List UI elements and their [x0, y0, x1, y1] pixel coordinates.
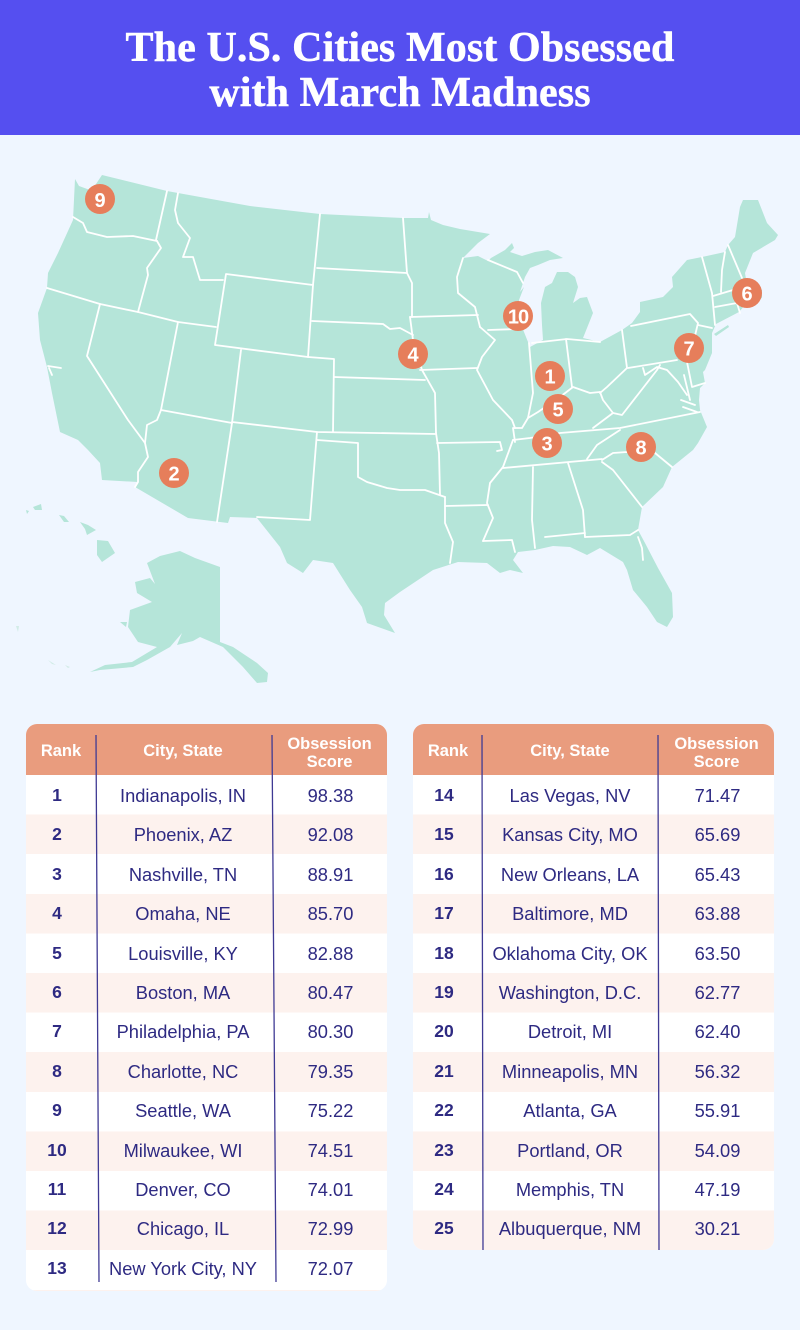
marker: 2 Phoenix	[159, 458, 189, 488]
marker: 10 Milwaukee: 10	[508, 306, 529, 328]
table rows: 10	[47, 1140, 67, 1160]
table rows: 12	[47, 1218, 67, 1238]
marker: 5 Louisville	[543, 394, 573, 424]
table header: Obsession	[674, 735, 759, 753]
table rows: 75.22	[308, 1100, 353, 1121]
table rows: Minneapolis, MN	[502, 1061, 638, 1082]
map of the United States	[16, 175, 778, 683]
marker: 6 Boston	[732, 278, 762, 308]
table rows: 62.77	[695, 982, 740, 1003]
marker: 7 Philadelphia	[674, 333, 704, 363]
marker: 2 Phoenix: 2	[168, 464, 180, 486]
marker: 9 Seattle: 9	[94, 190, 106, 212]
table rows: 47.19	[695, 1179, 740, 1200]
table rows: 23	[434, 1140, 454, 1160]
contiguous states landmass	[38, 175, 778, 633]
table rows: 25	[434, 1218, 454, 1238]
table rows: 63.88	[695, 903, 740, 924]
Hawaii	[26, 504, 127, 627]
table rows: 24	[434, 1179, 454, 1199]
table rows: 13	[47, 1258, 67, 1278]
table rows: 8	[52, 1061, 62, 1081]
title: with March Madness	[209, 70, 591, 116]
marker: 9 Seattle	[85, 184, 115, 214]
Alaska	[90, 551, 268, 683]
table rows: Milwaukee, WI	[124, 1140, 242, 1161]
table header: Obsession	[287, 735, 372, 753]
table rows: 92.08	[308, 824, 353, 845]
table rows: Oklahoma City, OK	[492, 943, 648, 964]
table rows: Washington, D.C.	[499, 982, 641, 1003]
table rows: Kansas City, MO	[502, 824, 638, 845]
table header: City, State	[143, 742, 223, 760]
table rows: Las Vegas, NV	[510, 785, 630, 806]
title: The U.S. Cities Most Obsessed	[126, 25, 674, 71]
table rows: 63.50	[695, 943, 740, 964]
table rows: Albuquerque, NM	[499, 1218, 641, 1239]
table rows: 14	[434, 785, 454, 805]
table rows: 16	[434, 864, 454, 884]
table rows: 9	[52, 1100, 62, 1120]
table rows: Louisville, KY	[128, 943, 238, 964]
marker: 8 Charlotte: 8	[635, 438, 647, 460]
table header: Score	[307, 753, 352, 771]
table header: Rank	[428, 742, 468, 760]
table rows: 55.91	[695, 1100, 740, 1121]
table rows: Detroit, MI	[528, 1021, 612, 1042]
table rows: 72.07	[308, 1258, 353, 1279]
table rows: Philadelphia, PA	[117, 1021, 249, 1042]
table rows: 74.01	[308, 1179, 353, 1200]
table rows: 65.43	[695, 864, 740, 885]
table header: Score	[694, 753, 739, 771]
Aleutian islands	[16, 626, 70, 668]
table header	[413, 724, 774, 775]
table rows: New York City, NY	[109, 1258, 257, 1279]
table rows: 85.70	[308, 903, 353, 924]
title	[126, 25, 674, 116]
table rows: 80.30	[308, 1021, 353, 1042]
table rows: Memphis, TN	[516, 1179, 624, 1200]
table rows: 54.09	[695, 1140, 740, 1161]
ranking table: ranks 14 to 25	[413, 724, 774, 1250]
marker: 4 Omaha: 4	[407, 344, 419, 366]
table rows: Omaha, NE	[135, 903, 231, 924]
table rows: 71.47	[695, 785, 740, 806]
table rows: Chicago, IL	[137, 1218, 229, 1239]
table rows: Indianapolis, IN	[120, 785, 246, 806]
table rows: Charlotte, NC	[128, 1061, 238, 1082]
table rows: 11	[48, 1179, 66, 1199]
table rows: 65.69	[695, 824, 740, 845]
table header: Rank	[41, 742, 81, 760]
table header: City, State	[530, 742, 610, 760]
table rows: Baltimore, MD	[512, 903, 628, 924]
table rows: 18	[434, 943, 454, 963]
Long Island	[714, 325, 729, 336]
table header	[26, 724, 387, 775]
marker: 3 Nashville: 3	[541, 434, 553, 456]
marker: 4 Omaha	[398, 339, 428, 369]
table rows: Boston, MA	[136, 982, 230, 1003]
table rows: 5	[52, 943, 62, 963]
table rows: 98.38	[308, 785, 353, 806]
table rows: 74.51	[308, 1140, 353, 1161]
table rows: 19	[434, 982, 454, 1002]
table rows: 82.88	[308, 943, 353, 964]
table rows: Atlanta, GA	[523, 1100, 617, 1121]
table rows: 3	[52, 864, 62, 884]
table rows: 4	[52, 903, 62, 923]
table rows: 56.32	[695, 1061, 740, 1082]
marker: 10 Milwaukee	[503, 301, 533, 331]
table rows: 17	[434, 903, 454, 923]
table rows: 1	[52, 785, 62, 805]
table rows: Nashville, TN	[129, 864, 237, 885]
marker: 1 Indianapolis	[535, 361, 565, 391]
table rows: 21	[434, 1061, 454, 1081]
marker: 3 Nashville	[532, 428, 562, 458]
table rows: 2	[52, 824, 62, 844]
table rows: 80.47	[308, 982, 353, 1003]
table rows: 20	[434, 1021, 454, 1041]
state borders	[47, 191, 742, 563]
table rows: 79.35	[308, 1061, 353, 1082]
table rows: 15	[434, 824, 454, 844]
marker: 5 Louisville: 5	[552, 400, 564, 422]
table rows: New Orleans, LA	[501, 864, 639, 885]
ranking table: ranks 1 to 13	[26, 724, 387, 1291]
table rows: 30.21	[695, 1218, 740, 1239]
table rows: 22	[434, 1100, 454, 1120]
marker: 6 Boston: 6	[741, 284, 753, 306]
table rows: Denver, CO	[135, 1179, 231, 1200]
table rows	[413, 775, 774, 1250]
marker: 7 Philadelphia: 7	[683, 338, 695, 360]
table rows	[26, 775, 387, 1291]
marker: 8 Charlotte	[626, 432, 656, 462]
table rows: 62.40	[695, 1021, 740, 1042]
title banner	[0, 0, 800, 135]
table rows: 6	[52, 982, 62, 1002]
table rows: 72.99	[308, 1218, 353, 1239]
marker: 1 Indianapolis: 1	[544, 366, 556, 388]
table rows: 88.91	[308, 864, 353, 885]
table rows: Phoenix, AZ	[134, 824, 232, 845]
table rows: 7	[52, 1021, 62, 1041]
table rows: Seattle, WA	[135, 1100, 231, 1121]
table rows: Portland, OR	[517, 1140, 623, 1161]
